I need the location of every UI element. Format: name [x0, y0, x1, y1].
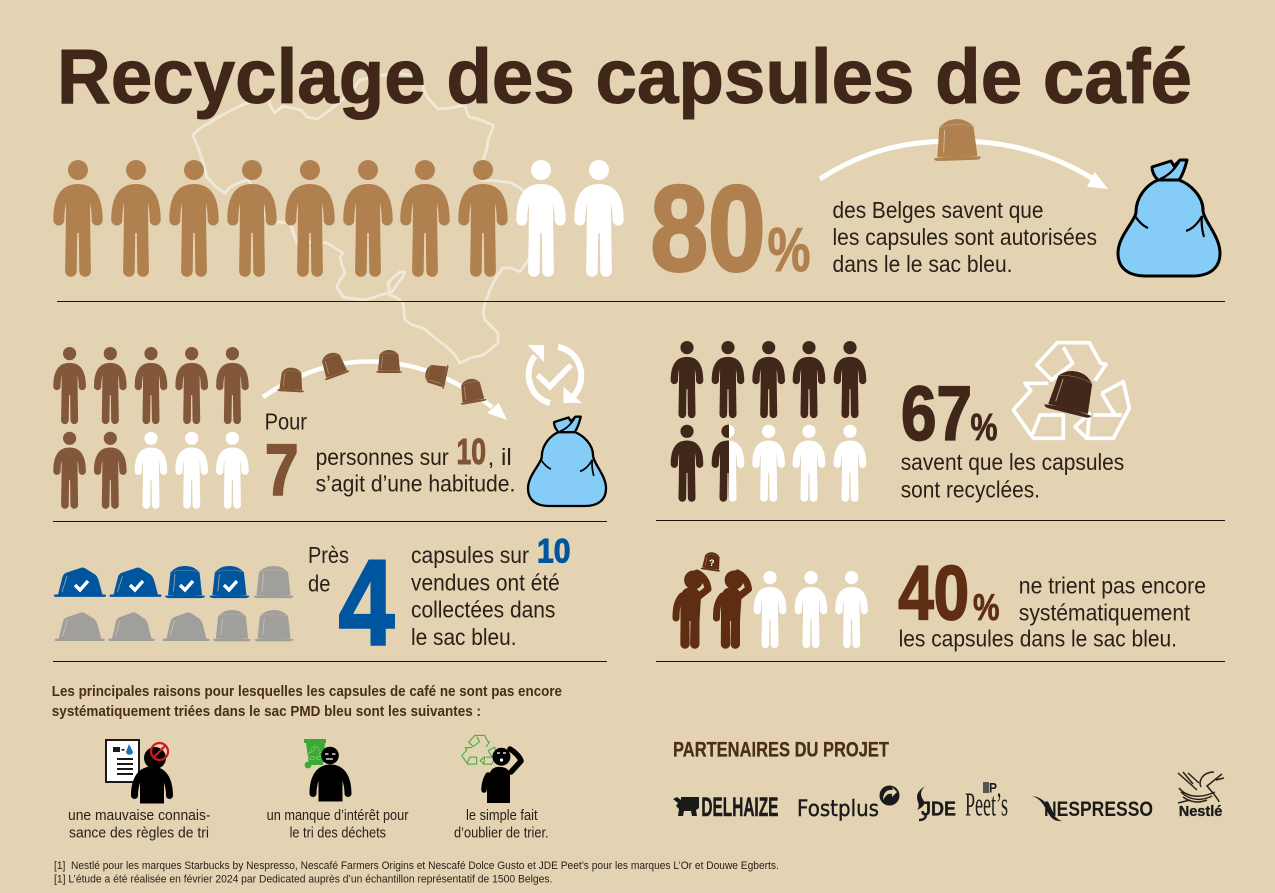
text: 40 percent description	[899, 572, 1206, 652]
statistic: 80%: 80	[650, 160, 766, 296]
text: nearly 4 out of 10 capsules: capsules sur	[411, 542, 529, 568]
icon: person with green bin	[304, 739, 352, 802]
pictogram: 40 percent confused people	[676, 551, 868, 649]
heading: main reasons: Les principales raisons pour lesquelles les capsules de café ne sont pas encore	[52, 683, 562, 700]
caption: poor knowledge of rules: sance des règles de tri	[69, 826, 209, 842]
pictogram: 4 out of 10 capsules	[54, 566, 294, 641]
text: nearly 4 out of 10 capsules: de	[308, 571, 330, 597]
caption: poor knowledge of rules: une mauvaise connais-	[68, 808, 211, 824]
logo: Fostplus: Fostplus	[797, 797, 879, 822]
logo: JDE Peet's: P	[989, 780, 997, 796]
text: 40 percent description: ne trient pas encore	[1019, 572, 1206, 598]
icon: small blue bag	[528, 417, 606, 506]
text: 7 out of 10	[265, 408, 515, 510]
text: 40 percent description: les capsules dans le sac bleu.	[899, 626, 1177, 652]
logo: Nestlé	[1178, 772, 1224, 820]
footnotes	[54, 860, 779, 885]
text: nearly 4 out of 10 capsules: Près	[308, 542, 349, 568]
caption: simply forgetting	[454, 808, 549, 842]
text: nearly 4 out of 10 capsules: 10	[537, 532, 570, 570]
statistic: 67%: 67	[901, 371, 972, 457]
text: 7 out of 10: Pour	[265, 408, 307, 434]
arrow: capsules on a curve	[263, 349, 507, 420]
logo: Fostplus	[797, 786, 900, 822]
text: 80% description	[832, 197, 1097, 277]
pictogram: 67 percent people	[671, 341, 866, 502]
statistic: 80%: %	[768, 216, 810, 285]
icon: person with rules sheet	[106, 740, 173, 804]
text: nearly 4 out of 10 capsules: 4	[338, 534, 395, 670]
caption: simply forgetting: d’oublier de trier.	[454, 826, 549, 842]
logo: JDE Peet's: Peet’s	[965, 787, 1008, 824]
pictogram: 40 percent confused people: ?	[709, 558, 714, 568]
text: 67 percent description: savent que les capsules	[901, 449, 1124, 475]
icon: habit cycle with check	[528, 345, 582, 403]
logo: Delhaize	[673, 792, 778, 822]
text: 7 out of 10: 10	[456, 431, 486, 472]
heading: main reasons	[52, 683, 562, 720]
map of Belgium outline	[193, 73, 533, 363]
title: Recyclage des capsules de café	[57, 34, 1192, 120]
icon: person forgetting	[462, 735, 521, 803]
logo: JDE Peet's: JDE	[921, 799, 956, 821]
statistic: 67%: %	[970, 407, 998, 449]
caption: lack of interest: un manque d’intérêt pour	[267, 808, 409, 824]
pictogram: 8 out of 10 people	[53, 160, 624, 277]
text: 67 percent description: sont recyclées.	[901, 476, 1040, 502]
statistic: 40%: %	[973, 587, 1000, 628]
text: 40 percent description: systématiquement	[1019, 600, 1190, 626]
text: 7 out of 10: , il	[488, 444, 512, 470]
caption: poor knowledge of rules	[68, 808, 211, 842]
caption: lack of interest: le tri des déchets	[290, 826, 386, 842]
caption: lack of interest	[267, 808, 409, 842]
text: 7 out of 10: personnes sur	[316, 444, 449, 470]
text: nearly 4 out of 10 capsules	[308, 532, 570, 670]
statistic: 40%: 40	[898, 550, 969, 636]
text: 80% description: les capsules sont autorisées	[832, 224, 1097, 250]
arrow: capsule into blue bag	[820, 118, 1108, 189]
text: 7 out of 10: s’agit d’une habitude.	[316, 471, 515, 497]
footnotes: [1] Nestlé pour les marques Starbucks by Nespresso, Nescafé Farmers Origins et Nescafé Dolce Gusto et JDE Peet’s pour les marques L’Or et Douwe Egberts.	[54, 860, 779, 872]
text: nearly 4 out of 10 capsules: le sac bleu.	[411, 624, 516, 650]
logo: Delhaize: DELHAIZE	[701, 792, 778, 822]
text: 67 percent description	[901, 449, 1124, 502]
heading: project partners: PARTENAIRES DU PROJET	[673, 739, 889, 762]
logo: Nespresso: NESPRESSO	[1044, 798, 1153, 821]
text: 80% description: des Belges savent que	[832, 197, 1044, 223]
icon: recycling symbol with capsule	[1013, 343, 1129, 438]
heading: main reasons: systématiquement triées dans le sac PMD bleu sont les suivantes :	[52, 703, 481, 720]
text: 7 out of 10: 7	[265, 430, 298, 510]
footnotes: [1] L’étude a été réalisée en février 2024 par Dedicated auprès d’un échantillon représentatif de 1500 Belges.	[54, 873, 552, 885]
text: 80% description: dans le le sac bleu.	[832, 251, 1012, 277]
logo: Nestlé: Nestlé	[1179, 803, 1222, 820]
logo: JDE Peet's	[917, 780, 1008, 824]
pictogram: 7 out of 10 people	[53, 347, 249, 509]
text: nearly 4 out of 10 capsules: collectées dans	[411, 597, 555, 623]
icon: blue bag	[1118, 160, 1220, 276]
caption: simply forgetting: le simple fait	[466, 808, 538, 824]
text: nearly 4 out of 10 capsules: vendues ont été	[411, 570, 560, 596]
